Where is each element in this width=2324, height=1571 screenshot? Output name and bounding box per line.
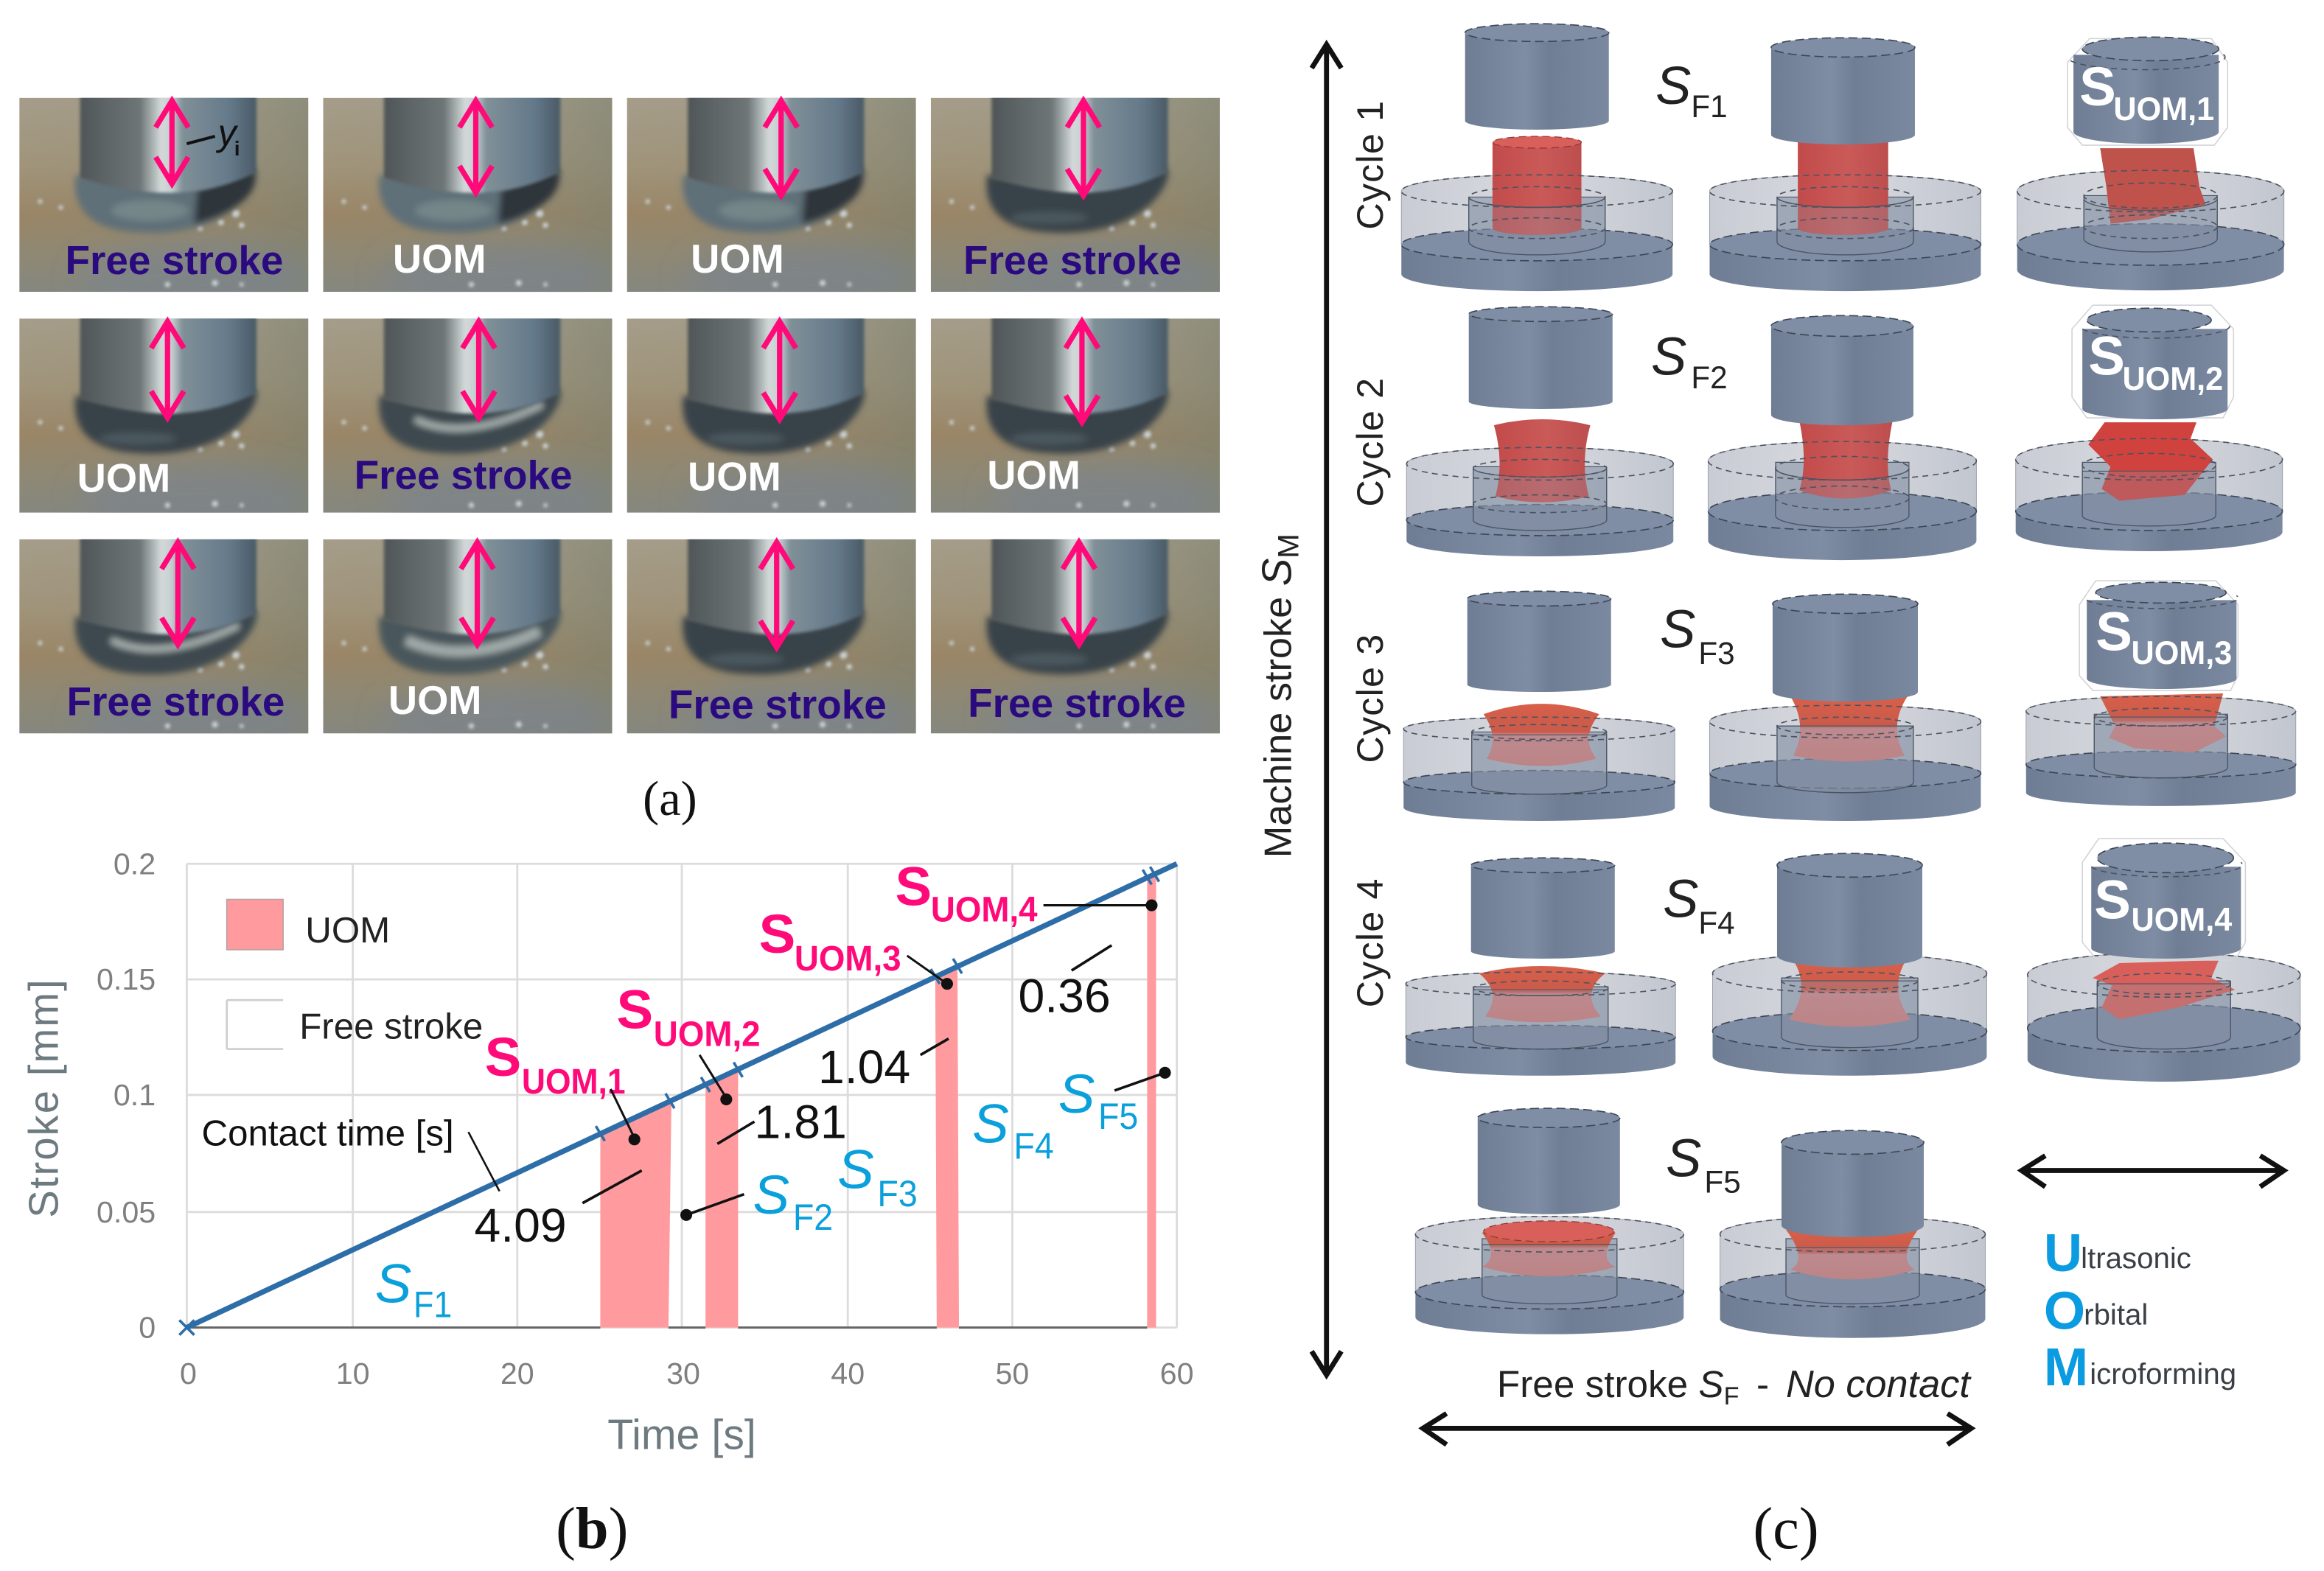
label: S_F1: F1 <box>1691 89 1728 124</box>
x axis tick labels: 20 <box>500 1357 534 1390</box>
blue S_F labels with leaders: F5 <box>1098 1096 1138 1137</box>
label: S_UOM,1: S <box>2079 56 2116 117</box>
panel b: stroke versus time chart <box>20 847 1194 1459</box>
pink S_UOM labels with leaders: S <box>759 903 795 965</box>
photo: row 1 column 2, UOM: UOM <box>393 237 486 281</box>
label: S_UOM,4: UOM,4 <box>2132 902 2233 938</box>
legend: ultrasonic orbital microforming: icroforming <box>2090 1357 2236 1390</box>
photo: row 3 column 1, free stroke: Free stroke <box>67 679 285 724</box>
x axis tick labels: 30 <box>666 1357 700 1390</box>
assembly: cycle 1 free stroke open <box>1401 24 1672 291</box>
photo: row 2 column 1, UOM <box>19 318 308 513</box>
blue S_F labels with leaders: F4 <box>1013 1125 1054 1166</box>
label: y_i measurement: y <box>216 112 239 153</box>
label: cycle 1: Cycle 1 <box>1350 100 1391 230</box>
label: S_F1 <box>1655 56 1728 124</box>
label: S_UOM,3: S <box>2096 601 2132 662</box>
y axis tick labels: 0 <box>139 1311 156 1345</box>
photo: row 3 column 4, free stroke <box>930 539 1220 734</box>
label: y_i measurement: i <box>234 137 240 160</box>
y axis tick labels: 0.15 <box>97 962 156 996</box>
x axis tick labels: 10 <box>336 1357 370 1390</box>
photo: row 1 column 1, free stroke <box>19 97 308 292</box>
photo: row 3 column 3, free stroke <box>627 539 916 734</box>
photo: row 3 column 4, free stroke: Free stroke <box>968 680 1186 726</box>
label: cycle 3: Cycle 3 <box>1350 634 1391 763</box>
blue S_F labels with leaders: F3 <box>877 1173 918 1214</box>
label: cycle 2: Cycle 2 <box>1350 377 1391 507</box>
x axis title: Time [s] <box>607 1412 756 1459</box>
photo: row 1 column 4, free stroke <box>930 97 1220 292</box>
pink S_UOM labels with leaders: UOM,2 <box>654 1015 761 1054</box>
contact time values <box>475 945 1112 1252</box>
label: y_i measurement <box>186 112 240 160</box>
label: machine stroke: Machine stroke S <box>1253 559 1299 858</box>
photo: row 3 column 2, UOM: UOM <box>388 678 482 723</box>
arrow: free stroke horizontal <box>1423 1413 1971 1444</box>
x axis tick labels: 60 <box>1160 1357 1194 1390</box>
label: S_UOM,1 <box>2079 56 2214 127</box>
photo: row 2 column 4, UOM: UOM <box>987 453 1081 498</box>
assembly: cycle 4 free stroke contact <box>1712 853 1986 1076</box>
UOM contact regions <box>600 874 1156 1328</box>
legend: free stroke <box>227 1000 483 1049</box>
legend: UOM: UOM <box>305 910 390 951</box>
pink S_UOM labels with leaders: S <box>617 979 653 1040</box>
blue S_F labels with leaders: F1 <box>413 1284 452 1326</box>
label: free stroke no contact: - <box>1746 1363 1779 1405</box>
label: S_UOM,2: UOM,2 <box>2122 361 2223 397</box>
assembly: cycle 2 UOM <box>2016 305 2283 551</box>
arrow: UOM horizontal <box>2022 1155 2284 1187</box>
label: S_UOM,4: S <box>2094 870 2131 931</box>
legend: ultrasonic orbital microforming: U <box>2044 1223 2082 1283</box>
y axis tick labels <box>97 847 156 1345</box>
photo: row 1 column 3, UOM <box>627 97 916 292</box>
blue S_F labels with leaders: S <box>753 1164 789 1225</box>
annotation: contact time <box>202 1113 500 1192</box>
pink S_UOM labels with leaders: S <box>485 1026 521 1088</box>
assembly: cycle 3 free stroke contact <box>1709 594 1981 821</box>
pink S_UOM labels with leaders: UOM,1 <box>522 1062 626 1102</box>
photo: row 1 column 3, UOM: UOM <box>691 237 784 281</box>
label: S_F5: F5 <box>1704 1165 1741 1200</box>
x axis tick labels <box>180 1357 1194 1390</box>
legend: ultrasonic orbital microforming <box>2044 1223 2236 1397</box>
caption b: ( <box>556 1496 576 1561</box>
legend: UOM <box>227 900 390 951</box>
photo: row 2 column 3, UOM <box>627 318 916 513</box>
assembly: cycle 4 free stroke open <box>1406 858 1675 1076</box>
label: S_F5 <box>1666 1129 1741 1200</box>
label: S_F2: S <box>1651 327 1686 387</box>
photo: row 2 column 3, UOM: UOM <box>688 455 781 500</box>
caption c: (c) <box>1753 1496 1819 1561</box>
blue S_F labels with leaders: S <box>1058 1063 1095 1124</box>
blue S_F labels with leaders: S <box>972 1093 1009 1154</box>
photo: row 2 column 1, UOM: UOM <box>77 456 170 501</box>
pink S_UOM labels with leaders: UOM,4 <box>931 890 1038 930</box>
photo: row 3 column 3, free stroke: Free stroke <box>669 682 887 727</box>
panel c: machine stroke axis <box>1253 44 1391 1375</box>
label: machine stroke: M <box>1271 533 1305 559</box>
label: free stroke no contact: Free stroke S <box>1497 1363 1724 1405</box>
photo: row 3 column 1, free stroke <box>19 539 308 734</box>
blue S_F labels with leaders: S <box>375 1253 411 1314</box>
pink S_UOM labels with leaders <box>485 856 1157 1145</box>
caption b: b) <box>576 1496 628 1561</box>
panel a: photo grid <box>19 89 1221 755</box>
pink S_UOM labels with leaders: UOM,3 <box>795 939 901 979</box>
label: S_UOM,1: UOM,1 <box>2113 91 2214 127</box>
assembly: cycle 2 free stroke contact <box>1708 315 1976 560</box>
assembly: cycle 3 free stroke open <box>1403 591 1675 821</box>
blue S_F labels with leaders: F2 <box>793 1197 833 1238</box>
photo: row 3 column 2, UOM <box>323 539 612 734</box>
chart grid <box>186 864 1177 1328</box>
photo: row 1 column 4, free stroke: Free stroke <box>963 237 1182 283</box>
label: S_F4 <box>1663 870 1735 940</box>
assembly: cycle 5 free stroke open <box>1415 1108 1683 1334</box>
label: S_UOM,3: UOM,3 <box>2132 635 2232 671</box>
annotation: contact time: Contact time [s] <box>202 1113 454 1153</box>
photo: row 2 column 2, free stroke: Free stroke <box>355 452 573 498</box>
assembly: cycle 1 UOM <box>2017 37 2284 290</box>
arrow: machine stroke <box>1312 44 1341 1375</box>
label: S_F2 <box>1651 327 1728 395</box>
y axis tick labels: 0.1 <box>114 1078 156 1112</box>
label: S_UOM,4 <box>2094 870 2233 938</box>
photo: row 2 column 2, free stroke <box>323 318 612 513</box>
stroke line with markers <box>179 864 1177 1335</box>
label: cycle 4: Cycle 4 <box>1350 878 1391 1007</box>
label: S_UOM,2: S <box>2088 326 2125 387</box>
label: S_UOM,2 <box>2088 326 2223 397</box>
blue S_F labels with leaders <box>375 1063 1171 1326</box>
contact time values: 1.81 <box>755 1095 847 1148</box>
blue S_F labels with leaders: S <box>837 1139 874 1200</box>
legend: ultrasonic orbital microforming: ltrasonic <box>2081 1242 2191 1275</box>
photo: row 1 column 1, free stroke: Free stroke <box>66 237 283 283</box>
label: S_F5: S <box>1666 1129 1701 1189</box>
baseline <box>186 1327 1147 1329</box>
label: S_F4: F4 <box>1698 906 1735 940</box>
assembly: cycle 1 free stroke contact <box>1709 38 1981 291</box>
assembly: cycle 5 free stroke contact <box>1720 1130 1985 1338</box>
label: S_F3: F3 <box>1698 636 1735 671</box>
x axis tick labels: 0 <box>180 1357 197 1390</box>
contact time values: 1.04 <box>818 1040 910 1094</box>
contact time values: 0.36 <box>1018 969 1111 1022</box>
assembly: cycle 2 free stroke open <box>1406 307 1673 556</box>
contact time values: 4.09 <box>475 1199 567 1252</box>
legend: ultrasonic orbital microforming: M <box>2044 1337 2088 1397</box>
legend: ultrasonic orbital microforming: O <box>2044 1281 2085 1341</box>
y axis tick labels: 0.05 <box>97 1195 156 1229</box>
x axis tick labels: 50 <box>995 1357 1029 1390</box>
label: S_F1: S <box>1655 56 1691 116</box>
y axis title: Stroke [mm] <box>20 978 66 1218</box>
label: S_UOM,3 <box>2096 601 2232 671</box>
pink S_UOM labels with leaders: S <box>896 856 932 917</box>
x axis tick labels: 40 <box>831 1357 865 1390</box>
y axis tick labels: 0.2 <box>114 847 156 881</box>
legend: free stroke: Free stroke <box>299 1007 483 1047</box>
label: free stroke no contact: F <box>1724 1382 1739 1410</box>
assembly: cycle 4 UOM <box>2028 839 2300 1082</box>
arrows: pink double-headed strokes on the photos <box>151 101 1100 648</box>
label: S_F4: S <box>1663 870 1698 929</box>
label: S_F3 <box>1660 600 1735 671</box>
photo: row 2 column 4, UOM <box>930 318 1220 513</box>
label: free stroke no contact: No contact <box>1786 1363 1972 1406</box>
legend: ultrasonic orbital microforming: rbital <box>2084 1298 2148 1332</box>
label: S_F3: S <box>1660 600 1695 659</box>
photo: row 1 column 2, UOM <box>323 97 612 292</box>
label: S_F2: F2 <box>1691 360 1728 395</box>
assembly: cycle 3 UOM <box>2026 581 2296 806</box>
caption a: (a) <box>643 772 697 826</box>
